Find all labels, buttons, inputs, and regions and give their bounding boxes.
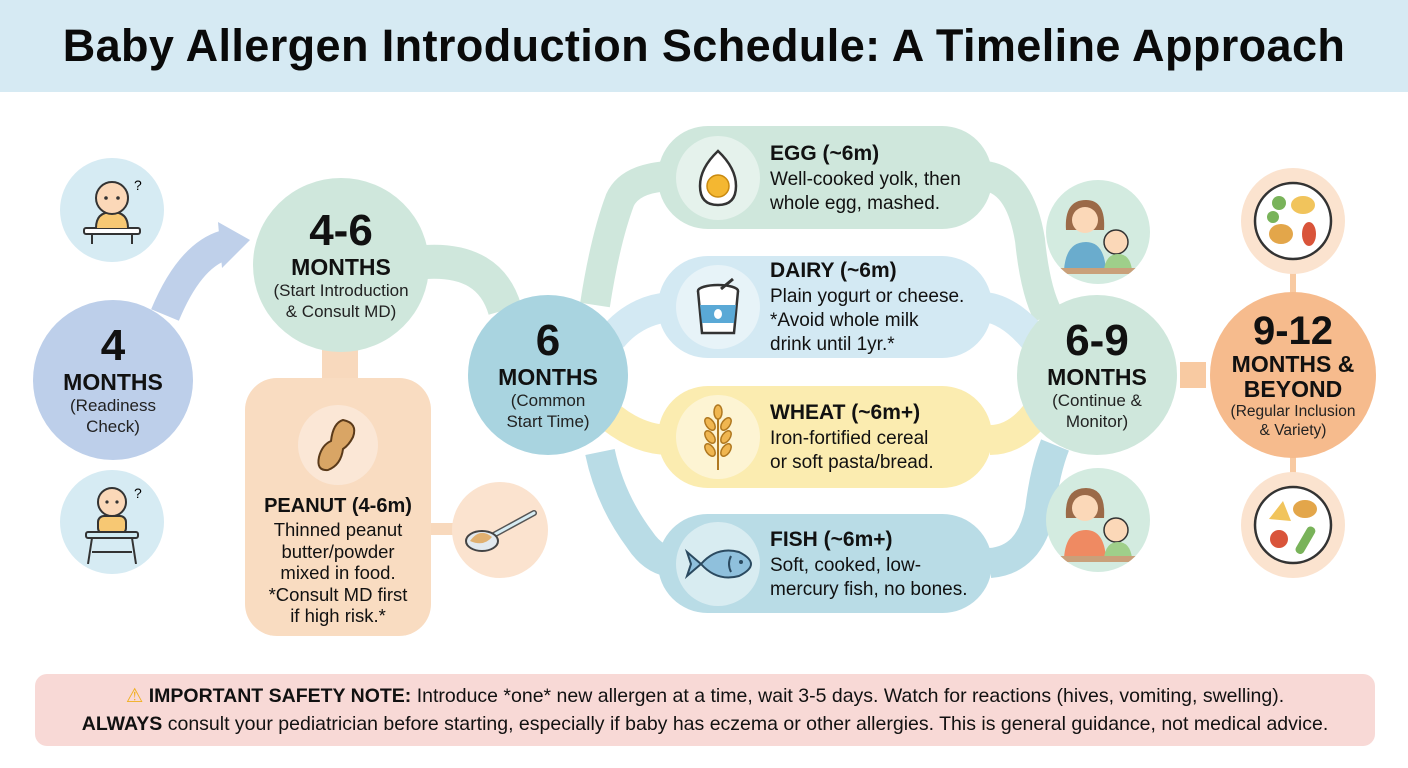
pill: egg — [658, 126, 992, 229]
icon: plate bottom — [1241, 472, 1345, 578]
circle: 9-12 months: & Variety) — [1260, 422, 1326, 439]
pill: wheat: Iron-fortified cereal — [770, 428, 928, 449]
pill: dairy: drink until 1yr.* — [770, 334, 895, 355]
arc: 4-6 to 6 — [425, 262, 505, 310]
connector: peanut to spoon — [428, 523, 456, 535]
circle: 6-9 months: MONTHS — [1047, 364, 1147, 390]
circle: 6 months: (Common — [511, 391, 585, 410]
icon: egg — [676, 136, 760, 220]
connector 6-9 to 9-12 — [1180, 362, 1206, 388]
icon: plate top — [1241, 168, 1345, 274]
circle: 4-6 months: & Consult MD) — [286, 302, 396, 321]
panel: peanut — [245, 378, 431, 636]
text: peanut: Thinned peanut — [274, 519, 402, 540]
safety note: ⚠ IMPORTANT SAFETY NOTE: Introduce *one* new allergen at a time, wait 3-5 days. Watch for reactions (hives, vomiting, swelling). — [126, 685, 1284, 707]
circle: 4-6 months: (Start Introduction — [273, 281, 409, 300]
text: peanut: mixed in food. — [280, 562, 396, 583]
title banner — [0, 0, 1408, 92]
safety note: ALWAYS consult your pediatrician before starting, especially if baby has eczema or other allergies. This is general guidance, not medical advice. — [82, 713, 1328, 735]
circle: 9-12 months: MONTHS & — [1232, 351, 1354, 377]
text: peanut: *Consult MD first — [269, 584, 407, 604]
circle: 9-12 months: 9-12 — [1253, 309, 1333, 353]
pill: wheat: WHEAT (~6m+) — [770, 401, 920, 424]
circle: 9-12 months — [1210, 292, 1376, 458]
bands 6 to pills — [595, 176, 670, 305]
circle: 4-6 months — [253, 178, 429, 352]
bands pills to 6-9 — [985, 176, 1048, 315]
connector: 4-6 to peanut — [322, 345, 358, 385]
pill: dairy: *Avoid whole milk — [770, 310, 919, 331]
text: peanut: if high risk.* — [290, 605, 386, 626]
icon: baby top: ? — [134, 177, 142, 193]
icon: parent feeding bottom — [1046, 468, 1150, 572]
circle: 6 months: Start Time) — [506, 412, 590, 431]
safety note — [35, 674, 1375, 746]
icon: yogurt — [676, 265, 760, 349]
circle: 4 months — [33, 300, 193, 460]
icon: baby bottom: ? — [134, 485, 142, 501]
pill: wheat: or soft pasta/bread. — [770, 452, 934, 473]
icon: peanut — [298, 405, 378, 485]
title banner: Baby Allergen Introduction Schedule: A Timeline Approach — [63, 20, 1345, 71]
icon: wheat — [676, 395, 760, 479]
circle: 6-9 months — [1017, 295, 1177, 455]
icon: baby bottom — [60, 470, 164, 574]
arrow: 4 to 4-6 — [165, 222, 250, 315]
circle: 6-9 months: Monitor) — [1066, 412, 1128, 431]
circle: 6-9 months: 6-9 — [1065, 316, 1129, 365]
pill: egg: EGG (~6m) — [770, 142, 879, 164]
circle: 6 months: MONTHS — [498, 364, 598, 390]
circle: 4-6 months: 4-6 — [309, 206, 373, 255]
icon: baby top — [60, 158, 164, 262]
circle: 6 months: 6 — [536, 316, 560, 365]
circle: 4-6 months: MONTHS — [291, 254, 391, 280]
circle: 4 months: (Readiness — [70, 396, 156, 415]
circle: 4 months: Check) — [86, 417, 140, 436]
pill: dairy: DAIRY (~6m) — [770, 259, 897, 282]
circle: 4 months: MONTHS — [63, 369, 163, 395]
icon: parent feeding top — [1046, 180, 1150, 284]
pill: dairy — [658, 256, 992, 358]
icon: fish — [676, 522, 760, 606]
circle: 6 months — [468, 295, 628, 455]
pill: egg: whole egg, mashed. — [770, 192, 940, 214]
text: peanut: PEANUT (4-6m) — [264, 495, 412, 517]
text: peanut: butter/powder — [281, 540, 395, 562]
icon: spoon — [452, 482, 548, 578]
pill: wheat — [658, 386, 992, 488]
circle: 4 months: 4 — [101, 321, 125, 370]
pill: dairy: Plain yogurt or cheese. — [770, 286, 964, 307]
text: peanut — [264, 495, 412, 626]
pill: fish: mercury fish, no bones. — [770, 578, 967, 600]
circle: 9-12 months: (Regular Inclusion — [1231, 403, 1355, 420]
circle: 6-9 months: (Continue & — [1052, 391, 1142, 410]
pill: egg: Well-cooked yolk, then — [770, 168, 961, 190]
pill: fish: Soft, cooked, low- — [770, 554, 921, 576]
circle: 9-12 months: BEYOND — [1244, 376, 1342, 402]
pill: fish — [658, 514, 992, 613]
pill: fish: FISH (~6m+) — [770, 528, 893, 550]
